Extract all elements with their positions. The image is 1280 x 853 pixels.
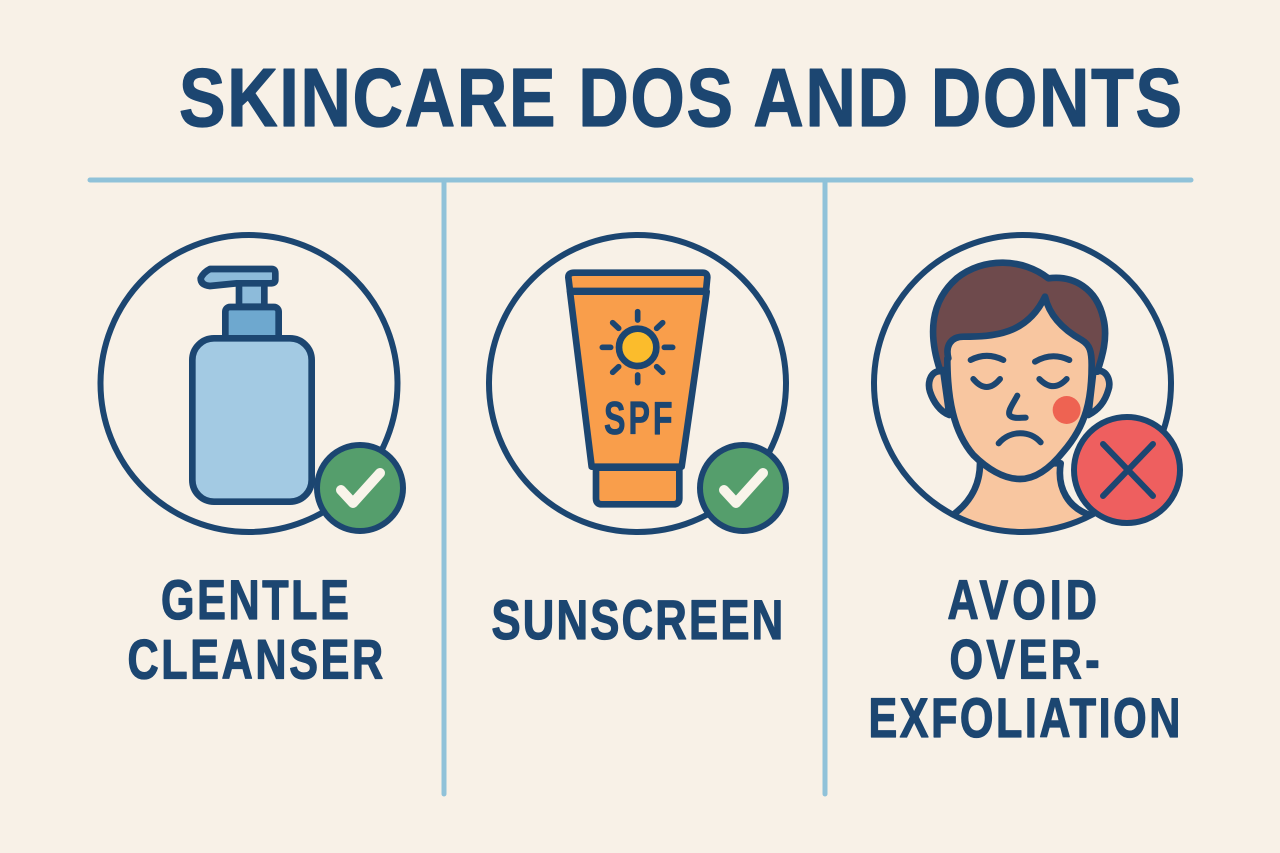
icon: cleanser circle	[100, 235, 398, 532]
panel: gentle cleanser	[100, 235, 403, 691]
icon: sunscreen circle	[489, 235, 786, 532]
label: gentle cleanser	[128, 569, 383, 691]
title: SKINCARE DOS AND DONTS	[179, 52, 1182, 144]
label: gentle cleanser: GENTLE	[161, 569, 349, 631]
text: SPF: SPF	[604, 393, 673, 444]
icon: sunscreen tube	[568, 273, 707, 504]
icon: irritated face	[929, 263, 1109, 545]
panel: sunscreen	[489, 235, 786, 651]
icon: green check badge	[700, 445, 786, 531]
label: avoid over-exfoliation: OVER-	[950, 628, 1100, 691]
label: avoid over-exfoliation	[868, 569, 1180, 749]
label: gentle cleanser: CLEANSER	[128, 628, 383, 691]
icon: pump bottle	[192, 269, 312, 502]
label: avoid over-exfoliation: AVOID	[948, 569, 1097, 631]
icon: sun	[602, 312, 673, 383]
label: sunscreen: SUNSCREEN	[492, 589, 783, 651]
label: avoid over-exfoliation: EXFOLIATION	[868, 687, 1180, 749]
icon: green check badge	[317, 445, 403, 531]
icon: red cross badge	[1074, 417, 1180, 523]
icon: avoid circle	[874, 235, 1171, 532]
panel: avoid over-exfoliation	[868, 235, 1180, 749]
